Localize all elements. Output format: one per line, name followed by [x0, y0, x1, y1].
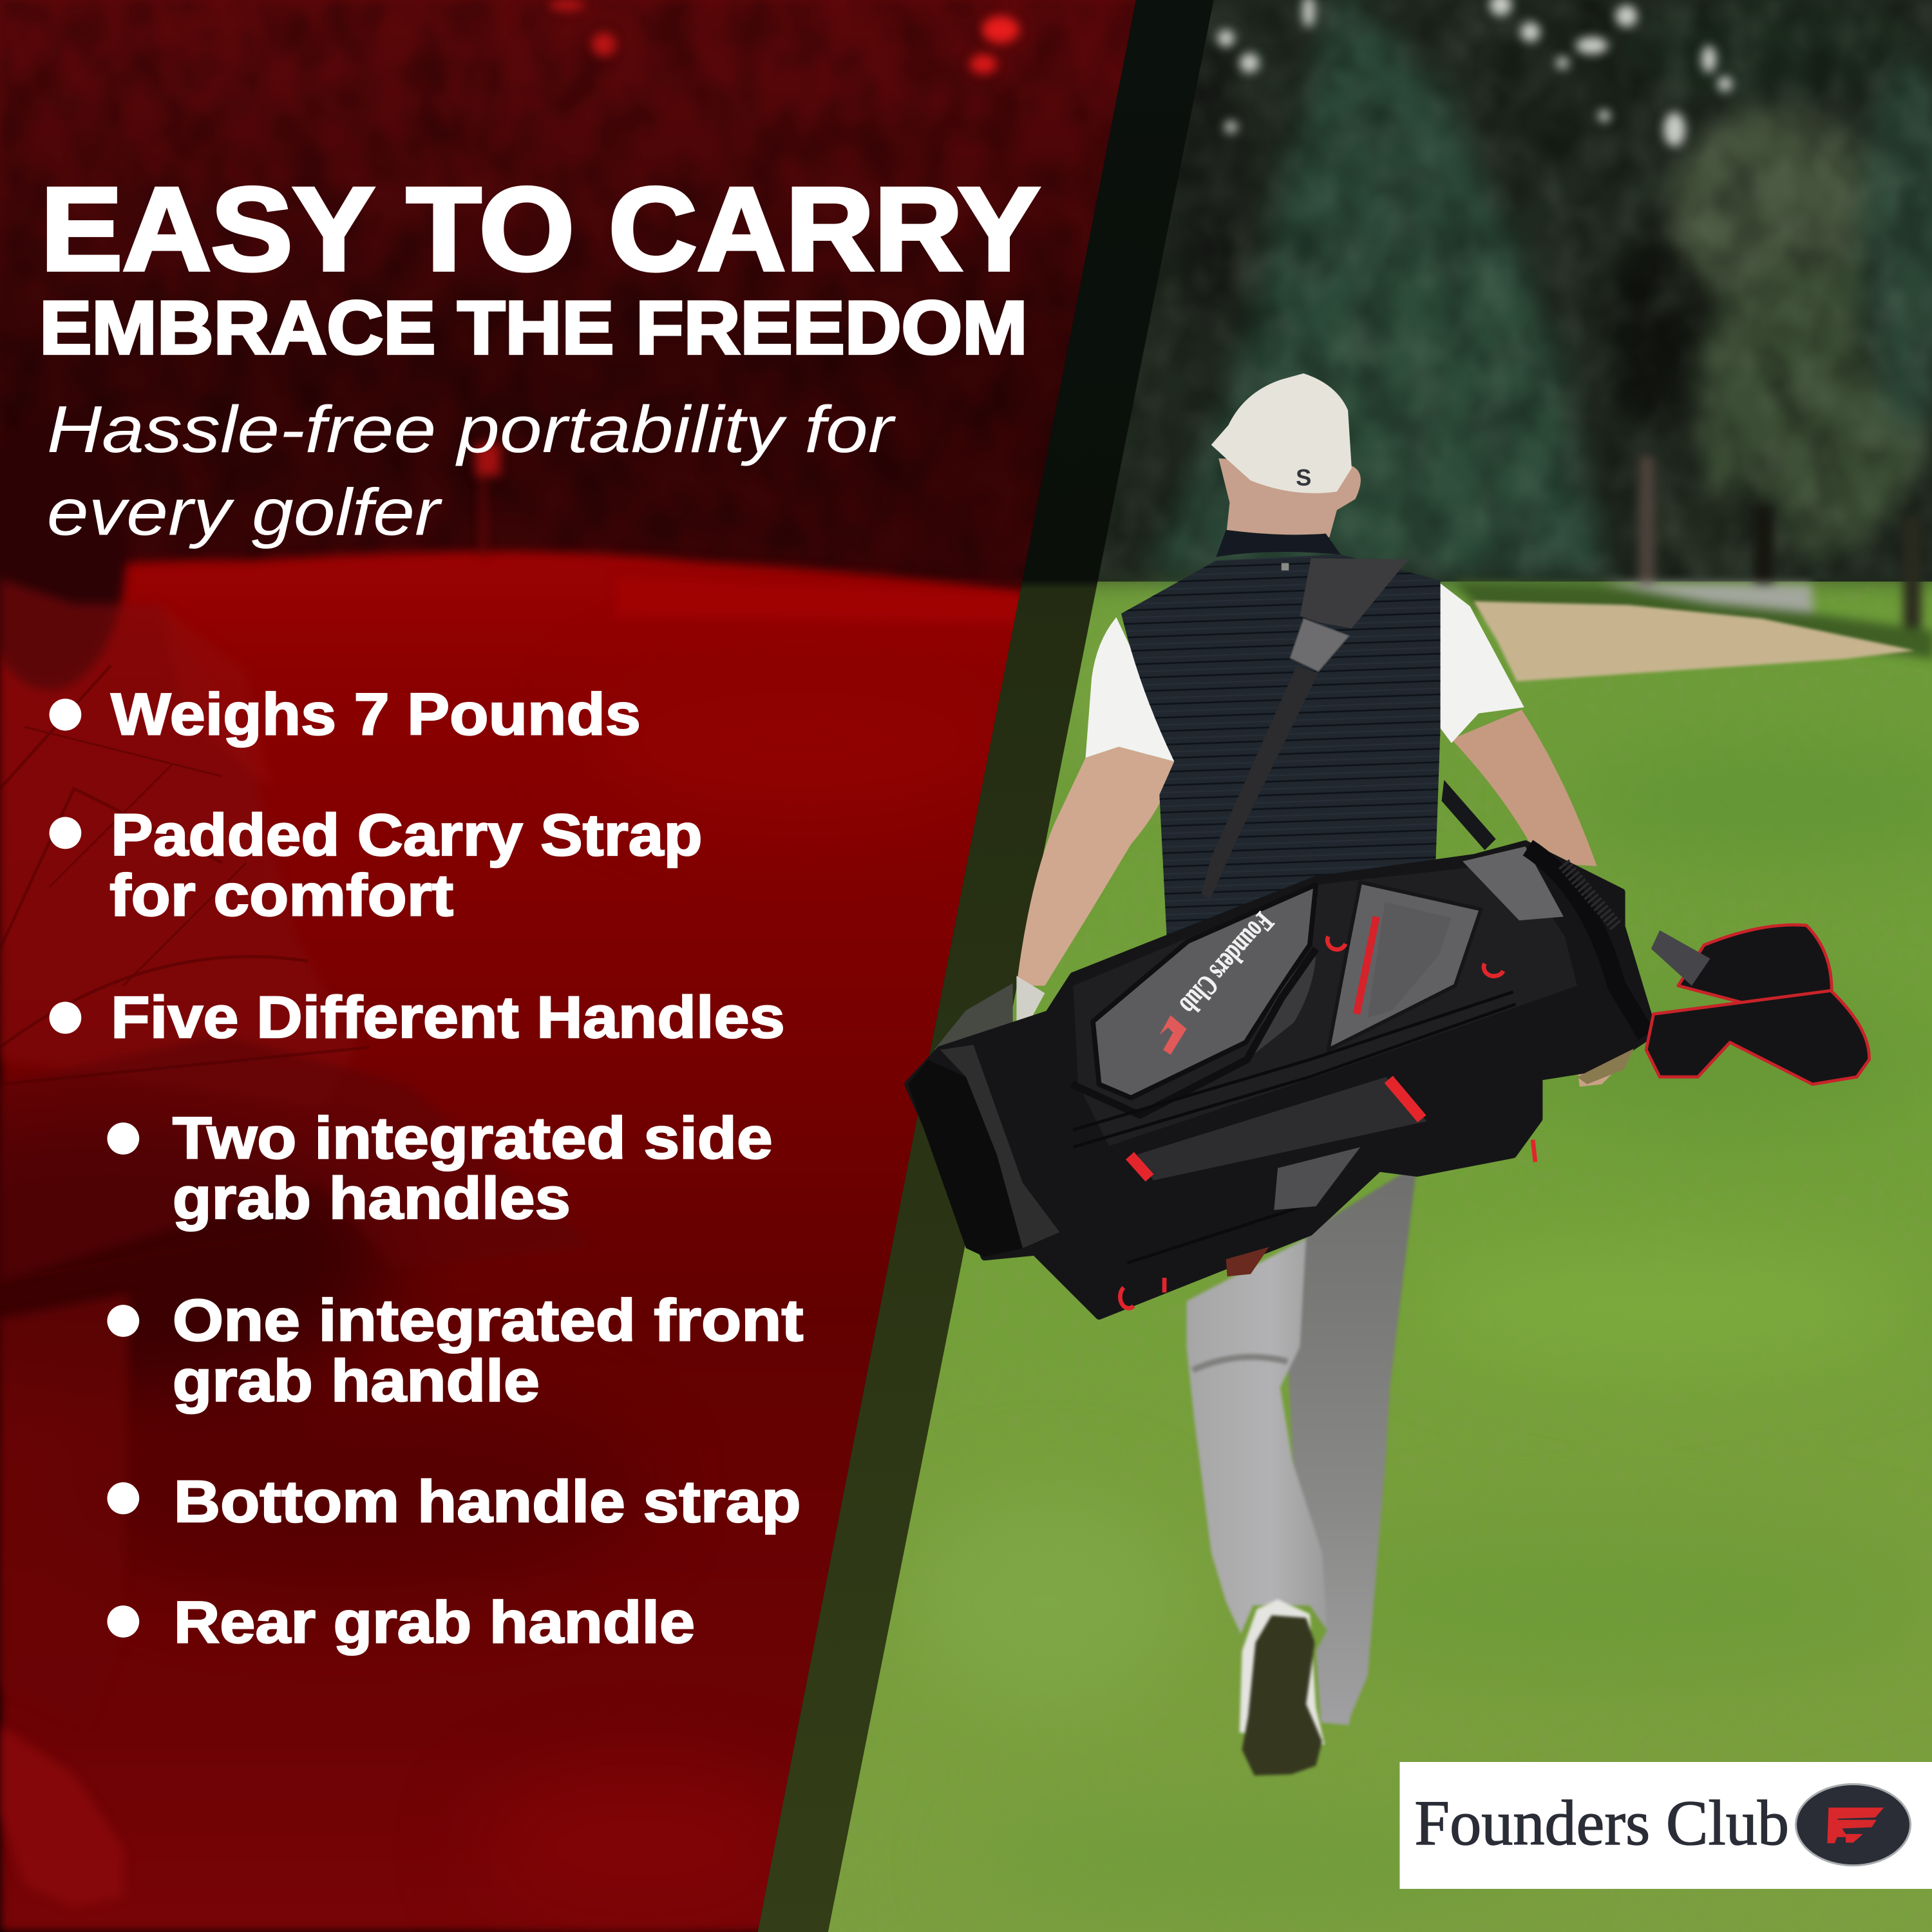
- trousers: [1186, 1164, 1417, 1725]
- cap: S: [1296, 464, 1311, 491]
- shoulder strap: [1201, 558, 1496, 900]
- red zip loops: [1120, 936, 1535, 1308]
- heading: easy to carry: EASY TO CARRY: [41, 163, 1040, 295]
- sub-bullet: front grab handle: grab handle: [173, 1348, 540, 1414]
- bag grey panel: [1093, 885, 1316, 1098]
- head: [1218, 459, 1361, 537]
- logo box: [1399, 1762, 1932, 1889]
- bag base: [908, 1059, 1023, 1257]
- shirt sleeves: [1086, 582, 1524, 761]
- bag inner second panel: [1368, 902, 1452, 1018]
- lower logo mark: [1226, 1247, 1269, 1276]
- vest: [1121, 530, 1441, 939]
- bag seams: [1073, 992, 1515, 1263]
- sub-bullet: side grab handles: Two integrated side: [173, 1105, 773, 1171]
- ribbed grip: [1564, 864, 1616, 927]
- photo: golf course background: [739, 0, 1932, 1932]
- bag second panel: [1328, 882, 1481, 1050]
- bag logo text: Founders Club: [1173, 906, 1280, 1021]
- woman bag lines: [0, 665, 370, 1282]
- panel: red duotone photo: [0, 0, 1146, 1932]
- sub-bullet: side grab handles: [107, 1105, 773, 1231]
- pocket seam: [1072, 949, 1316, 1115]
- bullet: padded carry strap: Padded Carry Strap: [111, 802, 703, 868]
- sub-bullet: bottom handle strap: Bottom handle strap: [174, 1469, 801, 1535]
- zipper pull: [1357, 916, 1376, 1014]
- glove: [934, 976, 1045, 1050]
- bullet: five different handles: Five Different Handles: [111, 985, 785, 1050]
- bag lower panel: [1274, 1147, 1360, 1210]
- grab handle tips: [1130, 1079, 1422, 1178]
- golfer walking: [908, 374, 1869, 1776]
- grab handle: [1137, 1077, 1427, 1180]
- bag top collar: [1463, 846, 1564, 920]
- fairway in red: [0, 551, 1035, 1932]
- tagline: [47, 392, 896, 549]
- bullet: weighs 7 pounds: Weighs 7 Pounds: [111, 681, 641, 747]
- golf bag: [908, 844, 1654, 1316]
- sub-bullet: front grab handle: [107, 1288, 803, 1414]
- sub-bullet: front grab handle: One integrated front: [173, 1288, 803, 1354]
- left arm: [1016, 746, 1174, 986]
- right hand: [1577, 1067, 1616, 1087]
- subheading: embrace the freedom: EMBRACE THE FREEDOM: [39, 285, 1028, 370]
- cap: [1211, 374, 1352, 493]
- sub-bullet: rear grab handle: Rear grab handle: [174, 1589, 695, 1655]
- headcovers: [1577, 925, 1869, 1084]
- right arm: [1452, 710, 1597, 866]
- tagline: every golfer: [47, 474, 442, 549]
- bag upper side panel: [1073, 862, 1577, 1146]
- diagonal dark strip: [758, 0, 1214, 1932]
- pocket inner panel: [1247, 949, 1316, 1059]
- bag body: [908, 844, 1654, 1316]
- bag logo mark: [1159, 1016, 1186, 1055]
- tagline: Hassle-free portability for: [47, 392, 896, 466]
- bullet: padded carry strap: [50, 802, 703, 929]
- bullet: padded carry strap: for comfort: [109, 863, 453, 929]
- brand badge: [1796, 1784, 1911, 1866]
- shoe: [1240, 1599, 1325, 1776]
- bag dark side strap: [1528, 848, 1646, 1035]
- feature list: [50, 681, 803, 1655]
- brand name: Founders Club: [1414, 1787, 1789, 1859]
- sub-bullet: side grab handles: grab handles: [173, 1166, 571, 1231]
